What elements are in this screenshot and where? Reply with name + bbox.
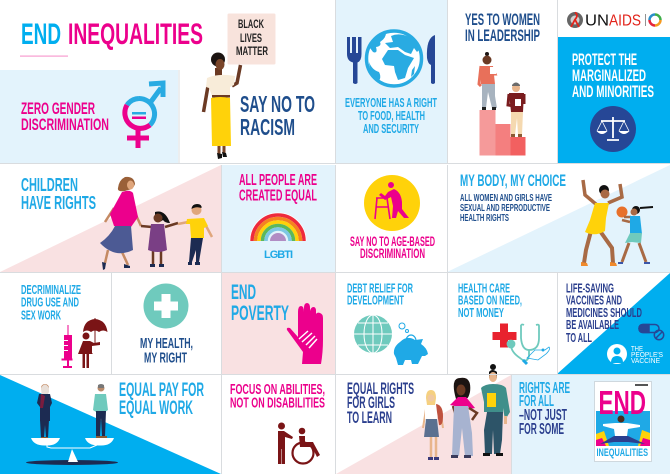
heading: women in leadership: YES TO WOMEN [465,10,540,29]
heading: decriminalize: DECRIMINALIZE [21,282,81,297]
text: right to food: TO FOOD, HEALTH [358,108,425,123]
report cover: END [598,384,646,421]
heading: children have rights: HAVE RIGHTS [21,193,96,213]
heading: say no to racism [240,91,315,140]
heading: all people are created equal: ALL PEOPLE ARE [239,172,317,189]
text: right to food: AND SECURITY [363,121,419,136]
heading: focus on abilities: NOT ON DISABILITIES [230,396,325,412]
panel: right to food [336,0,447,163]
logo: the people's vaccine: THE [631,344,643,353]
panel: rights are for all [512,375,670,474]
heading: rights are for all: RIGHTS ARE [519,380,570,397]
heading: vaccines and medicines: LIFE-SAVING [566,281,614,296]
chart: balance scale [26,438,118,465]
icon: scales of justice [590,106,636,152]
panel: decriminalize drug use and sex work [21,282,108,368]
logo: the people's vaccine: VACCINE [631,356,660,365]
text: right to food: EVERYONE HAS A RIGHT [345,95,437,110]
heading: equal rights for girls: TO LEARN [347,408,392,427]
icon: ball [616,206,628,218]
icon: health cross [144,284,188,328]
heading: all people are created equal [239,172,317,204]
chart: podium steps [480,110,526,156]
heading: equal rights for girls: FOR GIRLS [347,393,395,412]
panel: protect the marginalized [558,37,670,163]
illustration: woman on podium [479,52,497,110]
heading: decriminalize: SEX WORK [21,307,61,322]
heading: rights are for all: –NOT JUST [519,407,567,424]
illustration: girl with ball [618,206,653,264]
icon: woman under umbrella [78,318,108,368]
heading: zero gender discrimination: ZERO GENDER [21,99,95,118]
heading: zero gender discrimination [21,99,109,134]
text: my health my right: MY RIGHT [144,350,187,367]
panel: all people are created equal [222,165,335,272]
heading: women in leadership [465,10,540,45]
icon: rainbow [251,214,305,241]
text: sexual and reproductive health rights: SEXUAL AND REPRODUCTIVE [460,202,550,214]
icon: fork [347,37,362,84]
title: INEQUALITIES [68,18,203,51]
heading: children have rights: CHILDREN [21,175,78,195]
heading: zero gender discrimination: DISCRIMINATION [21,115,109,134]
illustration: girl in pink top [450,378,477,458]
panel: debt relief [347,281,428,365]
heading: rights are for all: FOR ALL [519,393,554,410]
heading: debt relief: DEBT RELIEF FOR [347,281,413,296]
icon: gender equality symbol [125,83,163,148]
heading: health care: HEALTH CARE [458,281,510,296]
heading: debt relief [347,281,413,308]
sign: black lives matter [228,14,276,64]
text: age-based discrimination: SAY NO TO AGE-BASED [350,234,435,249]
heading: focus on abilities: FOCUS ON ABILITIES, [230,382,325,398]
panel: life-saving vaccines [557,273,670,374]
icon: stethoscope [508,324,550,364]
text: right to food [345,95,437,136]
text: sexual and reproductive health rights [460,192,552,224]
heading: rights are for all [519,380,570,438]
heading: vaccines and medicines [566,281,642,345]
heading: health care: BASED ON NEED, [458,293,522,308]
icon: globe [354,315,392,353]
icon: helping hands [287,303,323,364]
illustration: girl with book [481,364,510,456]
heading: all people are created equal: CREATED EQUAL [239,188,317,204]
icon: syringe [62,325,72,368]
heading: decriminalize [21,282,81,322]
illustration: woman on scale [37,384,52,439]
heading: equal pay: EQUAL PAY FOR [119,380,204,401]
label: LGBTI: LGBTI [264,249,293,261]
panel: children have rights [0,165,221,272]
text: sexual and reproductive health rights: HEALTH RIGHTS [460,212,509,224]
sign: black lives matter: LIVES [240,31,262,45]
logo: UNAIDS [567,12,660,30]
heading: women in leadership: IN LEADERSHIP [465,26,540,45]
heading: equal pay: EQUAL WORK [119,398,193,419]
illustration: blond girl [423,390,443,460]
panel: equal pay for equal work [0,375,221,474]
heading: focus on abilities [230,382,325,412]
panel: equal rights for girls [336,364,511,474]
icon: red cross [492,324,516,348]
sign: black lives matter: BLACK [238,17,264,31]
heading: say no to racism: SAY NO TO [240,91,315,117]
heading: say no to racism: RACISM [240,114,295,140]
text: age-based discrimination: DISCRIMINATION [360,246,425,261]
heading: debt relief: DEVELOPMENT [347,293,404,308]
sign: black lives matter: MATTER [236,44,268,58]
panel: focus on abilities [230,382,325,464]
icon: pills [639,324,664,340]
heading: children have rights [21,175,96,213]
logo: the people's vaccine: PEOPLE'S [631,350,663,359]
logo: UNAIDS: AIDS [609,12,641,30]
panel: say no to age-based discrimination [350,175,435,261]
heading: protect the marginalized [572,50,654,101]
panel: end poverty [222,273,335,374]
heading: health care [458,281,522,320]
illustration: girl [141,211,178,267]
panel: my body my choice [447,165,670,272]
heading: vaccines and medicines: BE AVAILABLE [566,317,619,332]
logo: the people's vaccine [607,344,663,365]
icon: knife [427,35,435,84]
heading: end poverty: END [231,281,256,304]
panel: my health my right [140,284,193,367]
panel: zero gender discrimination [0,70,178,163]
heading: decriminalize: DRUG USE AND [21,295,79,310]
text: my health my right [140,335,193,367]
text: my health my right: MY HEALTH, [140,335,193,352]
panel: say no to racism [204,14,315,159]
heading: end poverty [231,281,289,325]
illustration: boy [178,204,212,265]
illustration: mother [100,177,141,270]
heading: equal rights for girls: EQUAL RIGHTS [347,379,414,398]
icon: piggy bank [394,323,428,365]
illustration: woman holding sign [204,52,240,159]
report cover [594,382,652,462]
panel: women in leadership [465,10,540,156]
heading: my body my choice: MY BODY, MY CHOICE [460,171,566,190]
heading: health care: NOT MONEY [458,305,504,320]
title: END [21,18,61,51]
logo: UNAIDS: UN [585,12,609,30]
title [20,18,203,57]
heading: end poverty: POVERTY [231,302,289,325]
panel: health care based on need [458,281,550,364]
heading: vaccines and medicines: TO ALL [566,330,592,345]
icon: person pushing wheelchair [278,422,320,464]
heading: rights are for all: FOR SOME [519,421,564,438]
heading: equal pay [119,380,204,419]
icon: globe [366,31,422,86]
text: age-based discrimination [350,234,435,261]
icon: elderly person with walker [364,175,420,231]
text: sexual and reproductive health rights: ALL WOMEN AND GIRLS HAVE [460,192,552,204]
illustration: man on podium [508,82,524,137]
heading: vaccines and medicines: VACCINES AND [566,293,622,308]
illustration: woman playing basketball [581,180,622,266]
illustration: man on scale [93,384,108,438]
heading: equal rights for girls [347,379,414,427]
